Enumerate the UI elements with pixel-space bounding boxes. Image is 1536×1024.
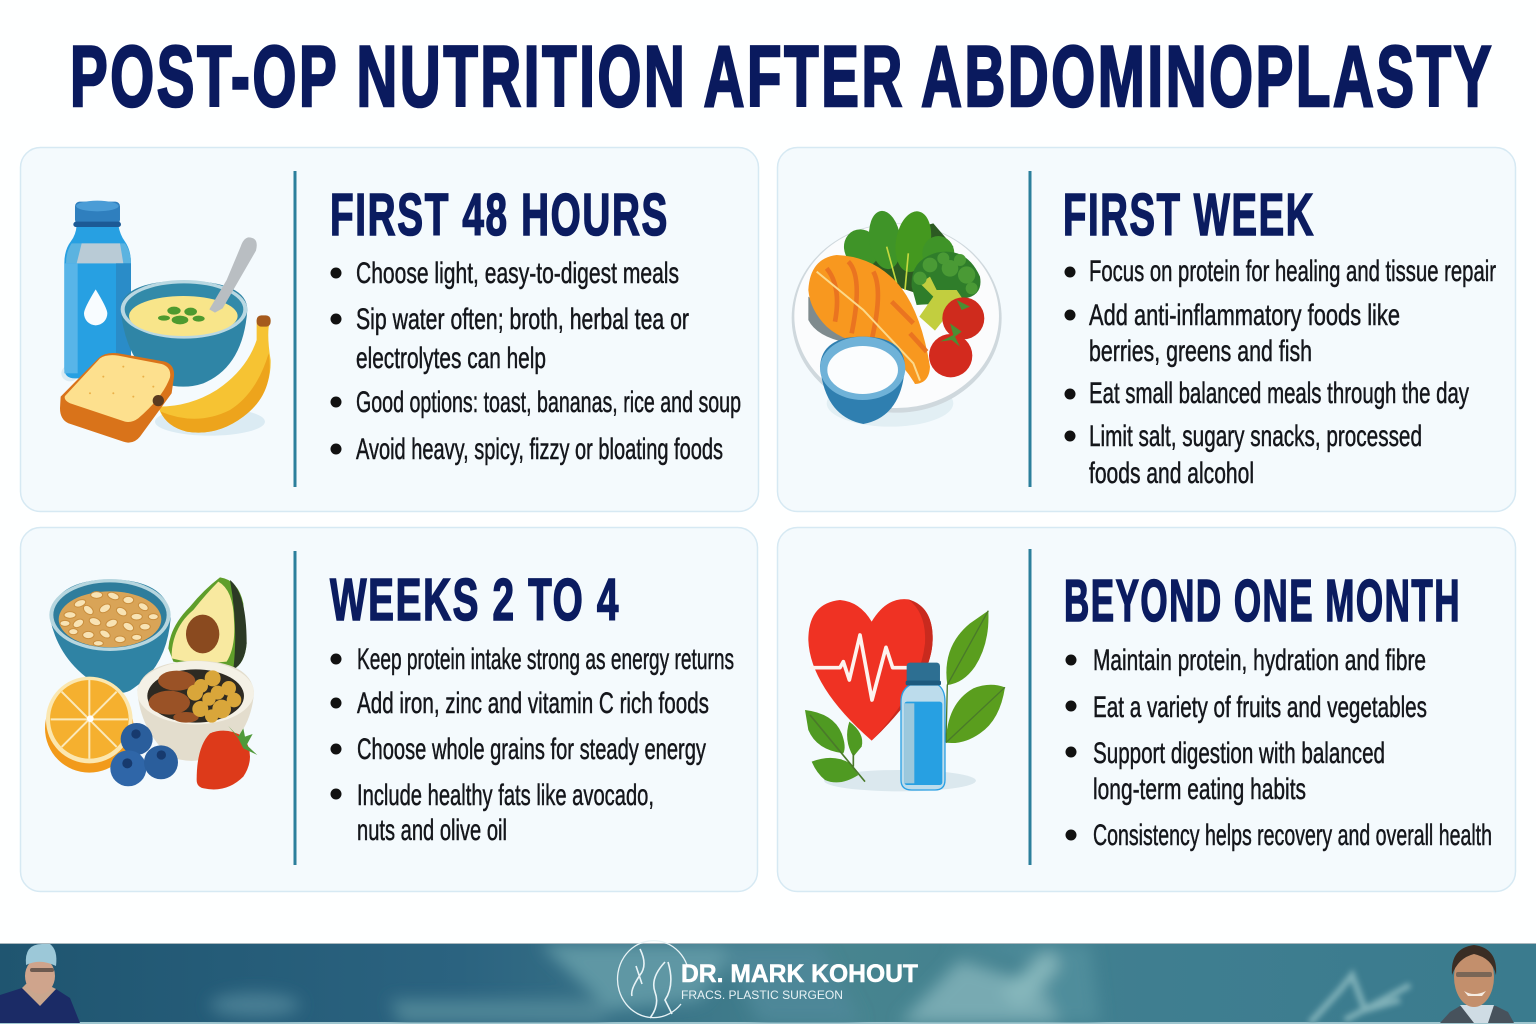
panel: first 48 hours [20,148,758,512]
bullet list: Include healthy fats like avocado, [357,779,654,812]
panel: first week [778,148,1516,512]
panel: beyond one month [778,528,1516,892]
bullet list [330,257,741,466]
icon: plate with salmon, greens, tomatoes and yogurt [792,208,1002,427]
icon: heart with pulse, water bottle and leaves [805,599,1005,791]
bullet list: Keep protein intake strong as energy returns [357,643,734,676]
heading: WEEKS 2 TO 4 [330,567,620,633]
bullet list: Choose whole grains for steady energy [357,733,706,766]
panel: weeks 2 to 4 [20,528,758,892]
bullet list [1064,255,1496,490]
heading: FIRST 48 HOURS [330,182,669,248]
bullet list [1066,644,1492,852]
bullet list: long-term eating habits [1093,773,1306,806]
bullet list: Sip water often; broth, herbal tea or [356,303,689,336]
bullet list: Support digestion with balanced [1093,737,1385,770]
bullet list: Avoid heavy, spicy, fizzy or bloating foods [356,433,723,466]
heading: FIRST WEEK [1063,182,1315,248]
bullet list: Choose light, easy-to-digest meals [356,257,679,290]
surgeon portrait left [0,944,80,1023]
bullet list: Good options: toast, bananas, rice and soup [356,386,741,419]
bullet list: foods and alcohol [1089,457,1254,490]
bullet list: electrolytes can help [356,342,546,375]
surgeon portrait right [1440,945,1514,1023]
icon: oats, avocado, orange, nuts and berries [45,577,257,789]
bullet list: berries, greens and fish [1089,335,1312,368]
logo name: DR. MARK KOHOUT [681,960,918,988]
logo emblem [618,941,687,1018]
bullet list: nuts and olive oil [357,814,507,847]
bullet list [330,643,734,847]
bullet list: Add iron, zinc and vitamin C rich foods [357,687,709,720]
logo subtitle: FRACS. PLASTIC SURGEON [681,988,843,1002]
bullet list: Add anti-inflammatory foods like [1089,299,1400,332]
footer banner [0,941,1536,1024]
icon: bottle, soup bowl, toast and banana [60,201,271,443]
